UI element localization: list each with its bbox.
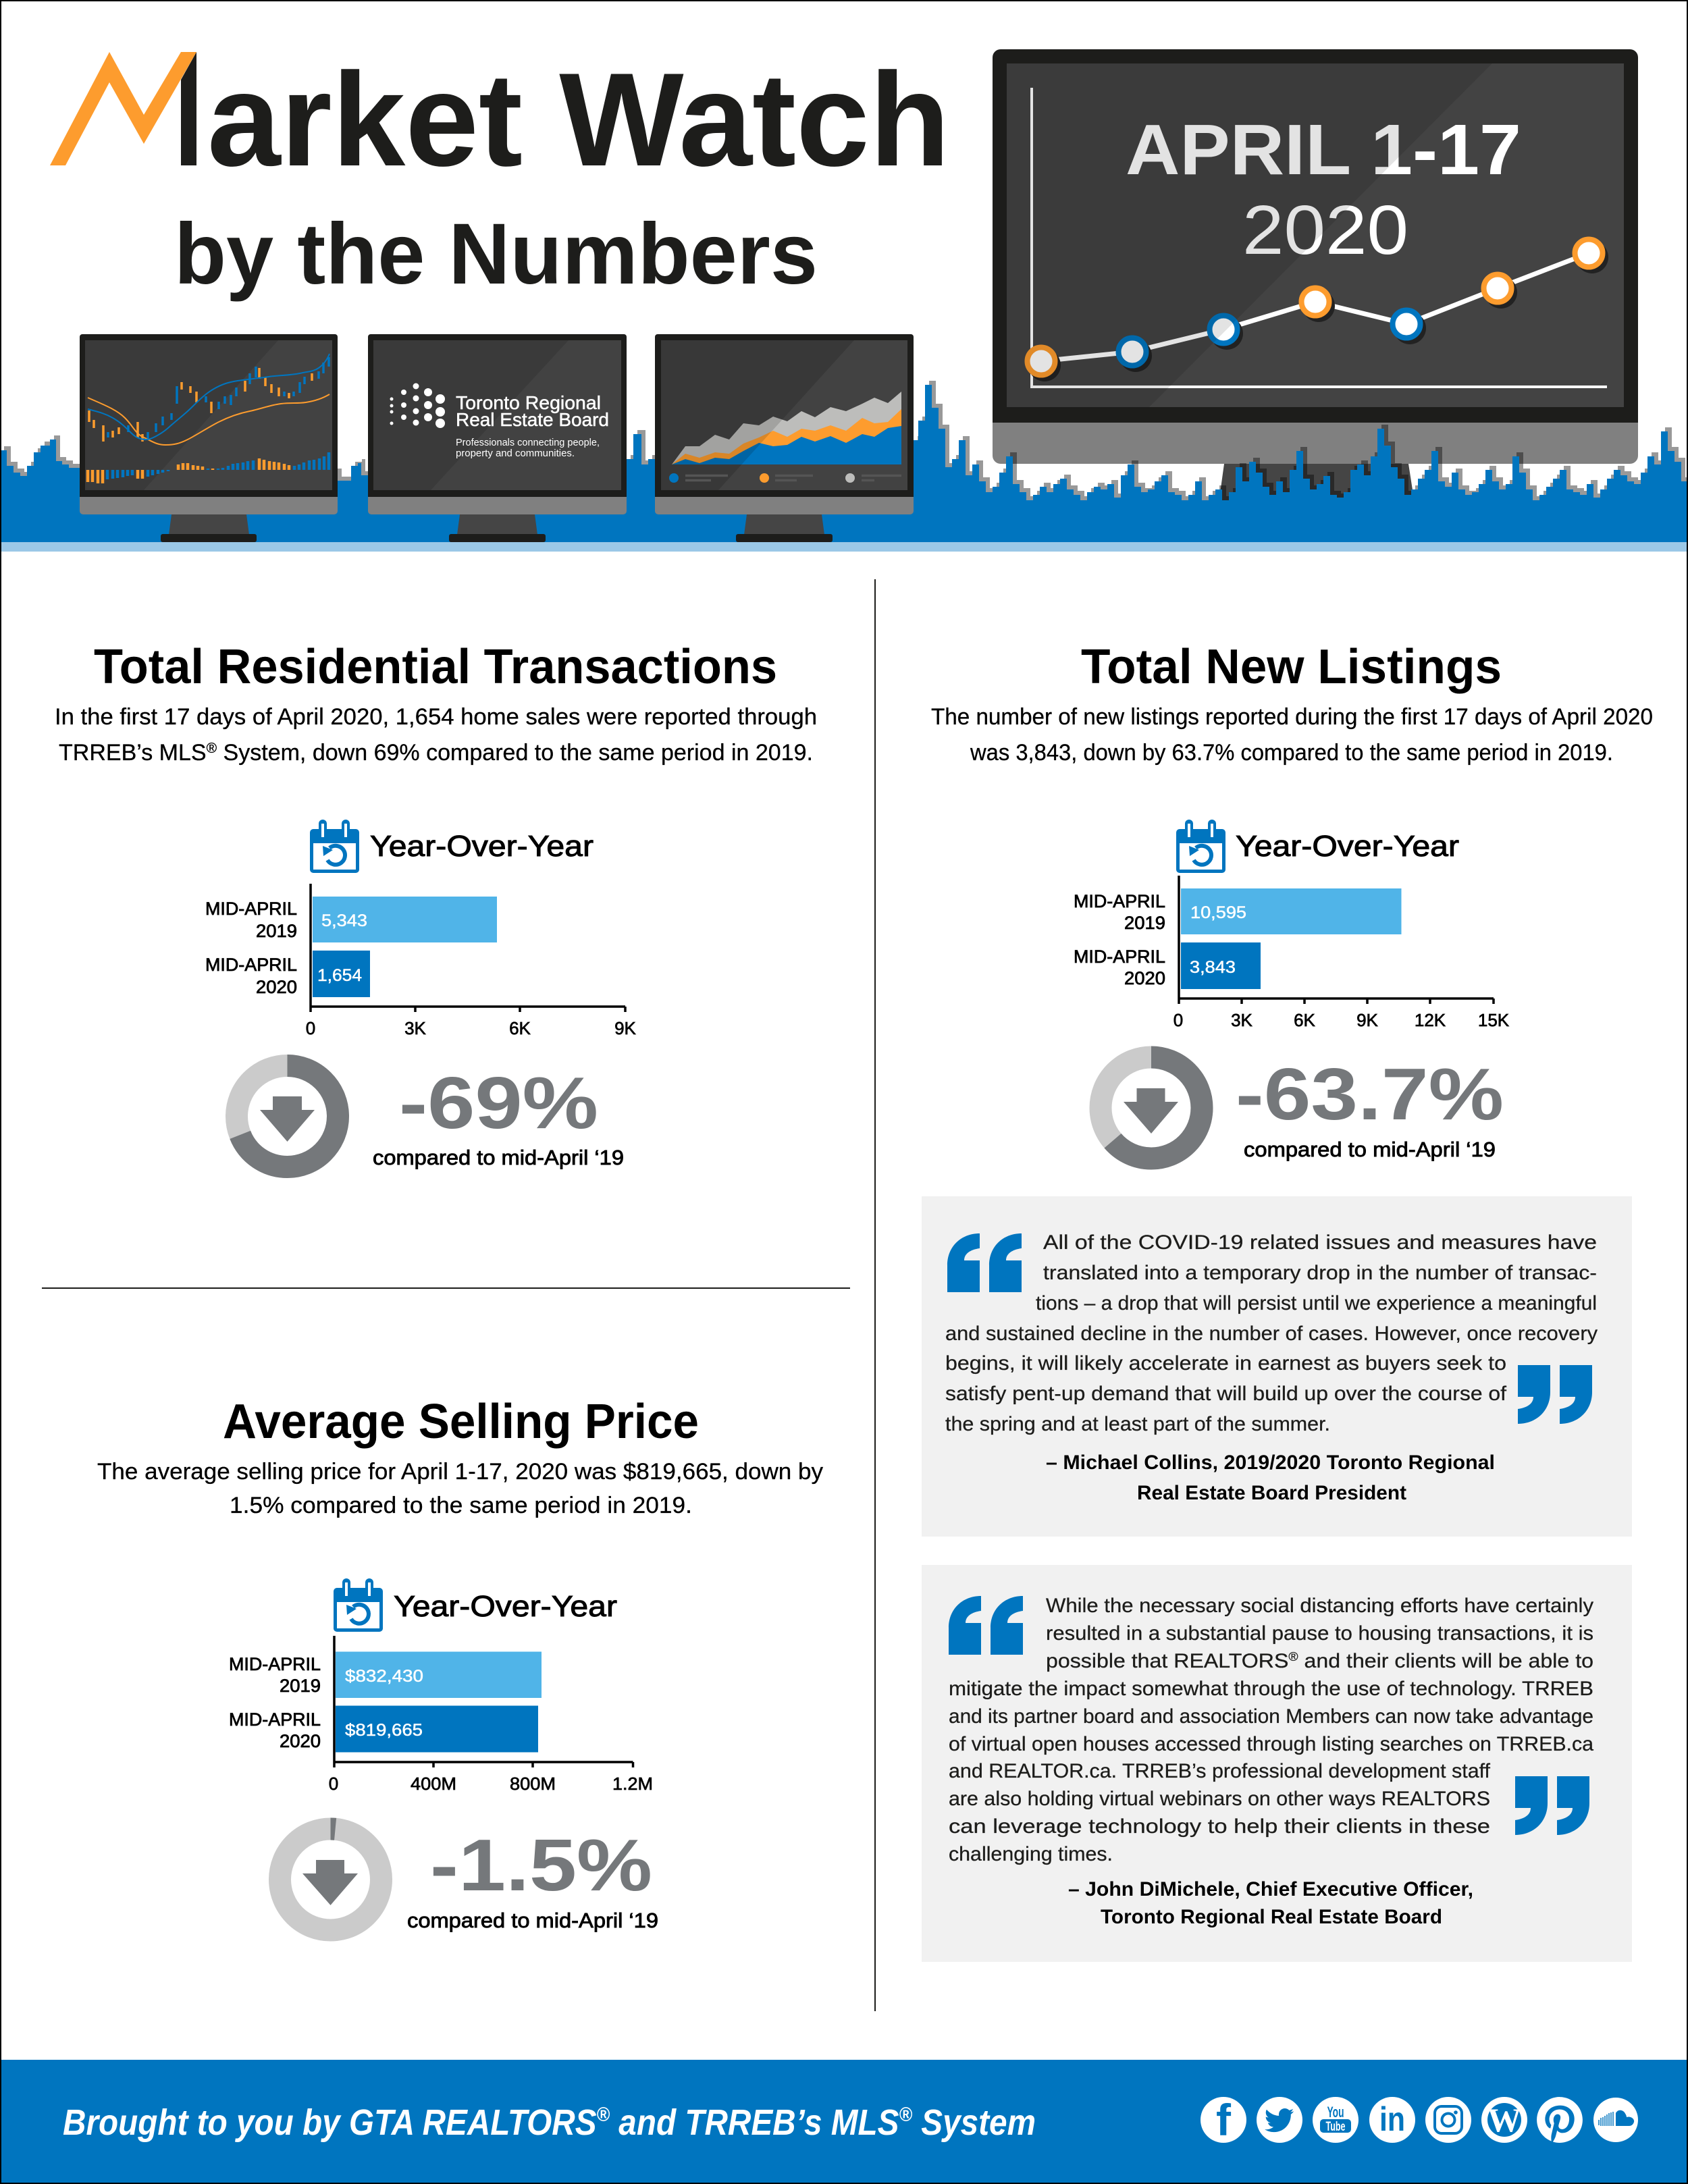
bar chart: 800M: [510, 1774, 556, 1794]
logo text: Professionals connecting people,: [456, 437, 600, 448]
quote text: challenging times.: [949, 1843, 1113, 1865]
attribution: – John DiMichele, Chief Executive Officer,: [1068, 1878, 1473, 1900]
quote text: resulted in a substantial pause to housing transactions, it is: [1046, 1622, 1593, 1645]
text block: In the first 17 days of April 2020, 1,654 home sales were reported through: [55, 704, 817, 730]
icon: opening quote mark: [947, 1233, 1022, 1292]
quote text: are also holding virtual webinars on other ways REALTORS: [949, 1788, 1490, 1810]
monitor: area chart: [655, 334, 914, 542]
quote text: translated into a temporary drop in the number of transac-: [1043, 1262, 1597, 1284]
bar chart: 2020: [280, 1731, 321, 1751]
volume bars: [88, 452, 329, 483]
bar chart: 2019: [280, 1676, 321, 1696]
logo text: Toronto Regional: [456, 392, 601, 413]
quote text: the spring and at least part of the summer.: [945, 1413, 1330, 1435]
date text: [1126, 110, 1521, 269]
bar chart: 9K: [1356, 1010, 1379, 1030]
bar chart: $832,430: [345, 1667, 423, 1686]
bar chart: MID-APRIL: [229, 1654, 321, 1674]
text block: was 3,843, down by 63.7% compared to the same period in 2019.: [970, 740, 1613, 766]
icon: opening quote mark: [949, 1596, 1023, 1655]
large monitor: April 1-17 2020: [993, 49, 1638, 503]
bar chart: 2020: [256, 977, 297, 997]
footer text: Brought to you by GTA REALTORS: [63, 2102, 667, 2143]
bar chart: [229, 1636, 653, 1794]
monitor: candlestick chart: [80, 334, 338, 542]
bar chart: 9K: [614, 1018, 637, 1038]
quote text: mitigate the impact somewhat through the use of technology. TRREB: [949, 1678, 1593, 1700]
bar chart: 3K: [1231, 1010, 1253, 1030]
attribution: – Michael Collins, 2019/2020 Toronto Regional: [1046, 1451, 1495, 1474]
quote text: ®: [1288, 1650, 1298, 1663]
icon: instagram: [1425, 2097, 1471, 2143]
bar chart: 400M: [411, 1774, 456, 1794]
attribution: Real Estate Board President: [1137, 1482, 1406, 1504]
area series: [672, 392, 901, 464]
quote text: can leverage technology to help their clients in these: [949, 1815, 1490, 1838]
panel: John DiMichele quote: [922, 1565, 1632, 1962]
bar chart: 12K: [1415, 1010, 1446, 1030]
text block: System, down 69% compared to the same period in 2019.: [217, 740, 813, 766]
icon: twitter: [1257, 2097, 1302, 2143]
donut: -69%: [236, 1065, 338, 1167]
quote text: and its partner board and association Members can now take advantage: [949, 1705, 1593, 1728]
bar chart: 2019: [1124, 913, 1165, 933]
icon: calendar: [310, 820, 359, 873]
bar chart: 0: [306, 1018, 315, 1038]
text block: ®: [207, 741, 217, 756]
icon: facebook: [1201, 2095, 1246, 2145]
text block: 1.5% compared to the same period in 2019.: [230, 1493, 692, 1518]
quote text: of virtual open houses accessed through listing searches on TRREB.ca: [949, 1733, 1593, 1755]
bar chart: 0: [1173, 1010, 1183, 1030]
icon: wordpress: [1481, 2097, 1527, 2143]
heading line: by the Numbers: by the Numbers: [174, 206, 818, 302]
monitor: Toronto Regional Real Estate Board logo: [368, 334, 627, 542]
bar chart: MID-APRIL: [1074, 891, 1165, 911]
trend lines: [88, 354, 329, 445]
panel: Total New Listings: [931, 640, 1653, 1161]
icon: closing quote mark: [1515, 1776, 1589, 1835]
candlesticks: [89, 357, 329, 442]
heading: Total New Listings: [1081, 640, 1502, 694]
legend: [669, 473, 901, 483]
bar chart: 3,843: [1190, 958, 1236, 977]
icon: linkedin: in: [1379, 2100, 1405, 2138]
icon: youtube: Tube: [1326, 2120, 1345, 2134]
panel: Total Residential Transactions: [55, 640, 817, 1169]
quote text: While the necessary social distancing efforts have certainly: [1046, 1595, 1593, 1617]
bar chart: 1,654: [317, 966, 362, 985]
heading: Total Residential Transactions: [94, 640, 777, 694]
icon: wordpress: W: [1487, 2101, 1521, 2139]
footer text: and TRREB’s MLS: [610, 2102, 899, 2143]
bar chart: MID-APRIL: [229, 1709, 321, 1730]
date text: 2020: [1242, 191, 1408, 269]
bar chart: 15K: [1478, 1010, 1510, 1030]
stat caption: compared to mid-April ‘19: [373, 1146, 624, 1169]
donut: -63.7%: [1101, 1057, 1202, 1158]
icon: calendar: [1176, 820, 1225, 873]
heading line: arket Watch: arket Watch: [207, 45, 950, 194]
text block: [97, 1459, 823, 1518]
quote text: satisfy pent-up demand that will build up over the course of: [945, 1383, 1507, 1405]
social icons: [1201, 2095, 1638, 2145]
stat caption: compared to mid-April ‘19: [1244, 1138, 1496, 1161]
footer band: [0, 2060, 1688, 2184]
bar chart: MID-APRIL: [205, 899, 297, 919]
title: Market Watch by the Numbers: [50, 45, 950, 302]
bar chart: 6K: [1294, 1010, 1316, 1030]
icon: facebook: f: [1216, 2095, 1232, 2145]
icon: youtube: You: [1327, 2104, 1344, 2121]
icon: closing quote mark: [1518, 1365, 1592, 1424]
quote text: and sustained decline in the number of cases. However, once recovery: [945, 1323, 1598, 1345]
heading: Average Selling Price: [223, 1395, 699, 1449]
bar chart: 2020: [1124, 968, 1165, 988]
attribution: Toronto Regional Real Estate Board: [1101, 1906, 1442, 1928]
bar chart: [205, 884, 637, 1038]
bar chart: 5,343: [321, 911, 367, 930]
footer text: ®: [899, 2104, 913, 2126]
subheading: Year-Over-Year: [370, 830, 594, 863]
horizontal divider: [42, 1287, 850, 1289]
logo text: [456, 392, 609, 459]
quote text: [945, 1231, 1598, 1435]
text block: [931, 704, 1653, 766]
panel: Michael Collins quote: [922, 1196, 1632, 1537]
attribution: [1068, 1878, 1473, 1928]
bar chart: MID-APRIL: [1074, 947, 1165, 967]
icon: youtube: [1313, 2097, 1359, 2143]
attribution: [1046, 1451, 1495, 1504]
bar chart: 0: [329, 1774, 338, 1794]
icon: orange M logo: [50, 52, 196, 165]
subheading: Year-Over-Year: [1236, 830, 1459, 863]
logo text: Real Estate Board: [456, 409, 609, 430]
bar chart: 10,595: [1190, 903, 1246, 922]
donut: -1.5%: [280, 1829, 381, 1930]
icon: soundcloud: [1593, 2098, 1638, 2142]
subheading: Year-Over-Year: [394, 1590, 617, 1623]
bar chart: MID-APRIL: [205, 955, 297, 975]
bar chart: [1074, 876, 1510, 1030]
stat: -69%: -69%: [399, 1062, 598, 1144]
quote text: All of the COVID-19 related issues and measures have: [1043, 1231, 1597, 1254]
icon: dot logo: [390, 383, 445, 428]
date text: APRIL 1-17: [1126, 110, 1521, 190]
stat: -63.7%: -63.7%: [1236, 1053, 1504, 1136]
quote text: [949, 1595, 1593, 1865]
quote text: and their clients will be able to: [1298, 1650, 1593, 1672]
bar chart: 2019: [256, 921, 297, 941]
footer text: System: [912, 2102, 1036, 2143]
vertical divider: [874, 579, 876, 2011]
quote text: possible that REALTORS: [1046, 1650, 1273, 1672]
icon: calendar: [334, 1578, 383, 1632]
icon: linkedin: [1369, 2097, 1415, 2143]
quote text: begins, it will likely accelerate in earnest as buyers seek to: [945, 1352, 1506, 1375]
quote text: and REALTOR.ca. TRREB’s professional development staff: [949, 1760, 1491, 1782]
panel: Average Selling Price: [97, 1395, 823, 1932]
footer text: ®: [597, 2104, 610, 2126]
bar chart: $819,665: [345, 1721, 423, 1740]
icon: pinterest: [1537, 2097, 1583, 2143]
text block: The number of new listings reported during the first 17 days of April 2020: [931, 704, 1653, 730]
bar chart: 3K: [404, 1018, 427, 1038]
stat: -1.5%: -1.5%: [430, 1824, 652, 1907]
quote text: tions – a drop that will persist until we experience a meaningful: [1036, 1292, 1597, 1314]
city skyline: [0, 381, 1688, 552]
text block: The average selling price for April 1-17, 2020 was $819,665, down by: [97, 1459, 823, 1485]
bar chart: 6K: [509, 1018, 531, 1038]
text block: TRREB’s MLS: [59, 740, 207, 766]
line chart: [1028, 88, 1608, 387]
bar chart: 1.2M: [612, 1774, 653, 1794]
logo text: property and communities.: [456, 448, 575, 459]
stat caption: compared to mid-April ‘19: [407, 1909, 658, 1932]
text block: [55, 704, 817, 766]
